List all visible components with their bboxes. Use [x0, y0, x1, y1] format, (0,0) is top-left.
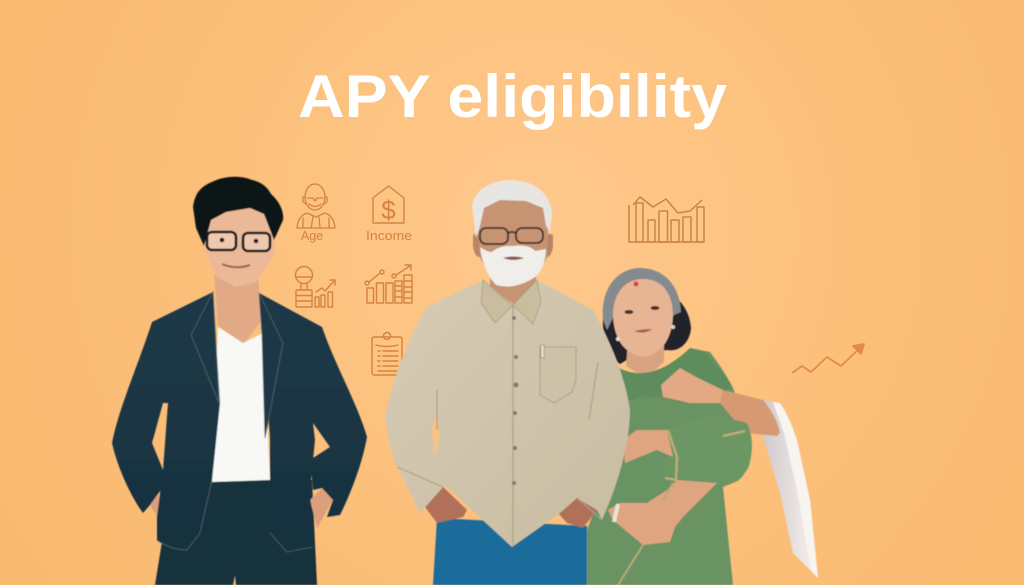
glasses — [207, 232, 270, 251]
person: older woman in green — [587, 268, 818, 585]
grey hair — [603, 268, 681, 330]
trousers — [155, 480, 317, 585]
facial features — [616, 282, 675, 341]
ears — [473, 234, 553, 257]
neck — [626, 340, 664, 378]
bracelet — [614, 504, 618, 522]
shirt — [385, 280, 630, 547]
eyes and smile — [220, 238, 258, 267]
icon: rising trend arrow — [792, 344, 864, 373]
icon: bar chart with trend line — [629, 197, 704, 242]
neck — [490, 262, 536, 304]
hand on chest — [661, 368, 723, 403]
head — [478, 192, 548, 288]
icon: savings person and chart — [296, 266, 335, 307]
icon: growth bars — [365, 265, 412, 303]
sleeve trim — [665, 430, 745, 480]
icon: age — [297, 184, 335, 243]
lower arm and clasped hands — [608, 480, 717, 545]
scarf — [617, 348, 733, 402]
outstretched arm — [720, 390, 780, 436]
icon: clipboard — [372, 332, 402, 375]
neck — [214, 275, 262, 344]
paper scroll — [763, 400, 818, 578]
title: APY eligibility — [298, 63, 728, 130]
lapels — [191, 292, 283, 438]
forearm — [623, 430, 673, 463]
jeans — [433, 518, 587, 585]
beard — [480, 246, 546, 287]
person: young adult in dark blazer — [112, 177, 367, 585]
hands — [148, 488, 333, 528]
blazer right — [259, 293, 367, 552]
sleeve — [665, 414, 752, 482]
head — [202, 196, 276, 287]
hair — [472, 180, 552, 238]
glasses — [480, 228, 543, 244]
icon: income — [366, 186, 412, 243]
mouth — [503, 256, 524, 260]
icon: income: $ — [381, 195, 396, 225]
label: age: Age — [301, 229, 323, 243]
sari border — [618, 483, 673, 585]
blazer left — [112, 292, 220, 550]
hair — [193, 177, 283, 246]
label: income: Income — [366, 229, 412, 243]
hem piping — [157, 480, 313, 552]
shirt — [212, 327, 270, 482]
face — [613, 279, 673, 356]
dress — [587, 348, 751, 585]
dark hair — [603, 298, 691, 364]
shirt details — [397, 280, 602, 546]
person: older man in beige shirt — [385, 180, 630, 585]
hands in pockets — [425, 487, 597, 528]
